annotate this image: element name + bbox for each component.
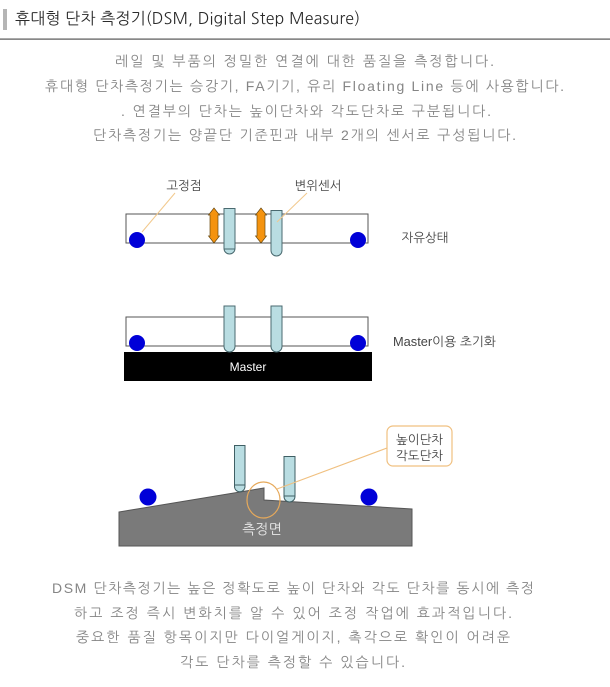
leader line	[277, 448, 387, 489]
master label: Master	[230, 360, 266, 374]
closing text block: 하고 조정 즉시 변화치를 알 수 있어 조정 작업에 효과적입니다.	[74, 605, 512, 621]
fixed point left	[140, 488, 156, 506]
master block	[124, 352, 372, 381]
closing text block: 중요한 품질 항목이지만 다이얼게이지, 촉각으로 확인이 어려운	[76, 629, 510, 645]
sensor 2	[271, 210, 282, 256]
arrow 2	[256, 208, 266, 243]
callout: 높이단차	[396, 433, 443, 447]
closing text block	[52, 580, 534, 670]
label: displacement sensor: 변위센서	[294, 179, 342, 193]
label: master init: Master이용 초기화	[393, 335, 496, 349]
intro text block: 휴대형 단차측정기는 승강기, FA기기, 유리 Floating Line 등에 사용합니다.	[45, 78, 564, 94]
sensor 1	[224, 306, 235, 352]
fixed point left	[129, 335, 145, 351]
sensor 1	[224, 208, 235, 254]
closing text block: DSM 단차측정기는 높은 정확도로 높이 단차와 각도 단차를 동시에 측정	[52, 580, 534, 596]
intro text block: . 연결부의 단차는 높이단차와 각도단차로 구분됩니다.	[121, 103, 491, 119]
closing text block: 각도 단차를 측정할 수 있습니다.	[180, 654, 405, 670]
surface label: 측정면	[242, 521, 282, 537]
diagram: free state	[126, 179, 449, 256]
heading: 휴대형 단차 측정기(DSM, Digital Step Measure)	[15, 10, 360, 27]
callout	[387, 426, 452, 466]
callout: 각도단차	[396, 449, 443, 463]
leader: fixed point	[142, 193, 175, 232]
sensor 2	[284, 456, 295, 502]
sensor 2	[271, 306, 282, 352]
sensor 1	[234, 446, 245, 492]
intro text block	[45, 53, 564, 143]
measured surface	[119, 488, 412, 546]
fixed point right	[350, 335, 366, 351]
highlight circle	[247, 482, 280, 518]
leader: sensor	[277, 193, 307, 222]
intro text block: 레일 및 부품의 정밀한 연결에 대한 품질을 측정합니다.	[115, 53, 494, 69]
fixed point right	[350, 232, 366, 248]
fixed point left	[129, 232, 145, 248]
arrow 1	[208, 208, 220, 243]
intro text block: 단차측정기는 양끝단 기준핀과 내부 2개의 센서로 구성됩니다.	[93, 127, 516, 143]
diagram: measuring surface	[119, 426, 452, 546]
label: free state: 자유상태	[401, 231, 449, 245]
diagram: master initialization	[124, 306, 496, 381]
heading	[0, 9, 610, 40]
fixed point right	[360, 488, 378, 506]
label: fixed point: 고정점	[166, 179, 202, 193]
